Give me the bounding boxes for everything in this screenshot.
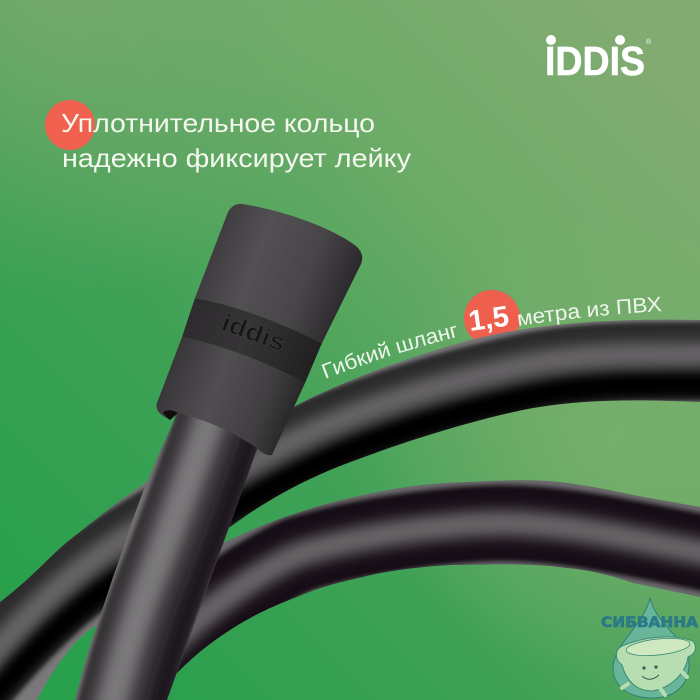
- fitting top cap: [195, 204, 362, 343]
- heading with red accent circle: Уплотнительное кольцо: [61, 108, 375, 138]
- hose length callout: метра из ПВХ: [518, 296, 662, 326]
- fitting dark inner opening: [163, 410, 178, 420]
- lower hose coil: [176, 480, 700, 674]
- fitting sealing ring with embossed logo: iddis: [218, 309, 289, 357]
- fitting sealing ring with embossed logo: [182, 298, 322, 383]
- brand logo: iDDiS: ®: [646, 38, 652, 46]
- hose length callout: Гибкий шланг: [322, 326, 456, 378]
- watermark wordmark: СИБВАННА: [601, 615, 698, 631]
- hose length callout: [322, 290, 662, 378]
- shower hose fitting: [157, 204, 362, 455]
- fitting lower collar: [157, 337, 305, 455]
- heading with red accent circle: [45, 100, 411, 173]
- upper hose coil: [0, 300, 700, 700]
- watermark bathtub: [616, 636, 695, 695]
- brand logo: iDDiS: IDDIS: [545, 38, 645, 84]
- vertical hose: [75, 413, 257, 700]
- heading with red accent circle: надежно фиксирует лейку: [62, 143, 411, 173]
- watermark: Sibvanna logo: [601, 598, 698, 698]
- hose length callout: 1,5: [467, 301, 511, 338]
- watermark drop: [613, 598, 689, 698]
